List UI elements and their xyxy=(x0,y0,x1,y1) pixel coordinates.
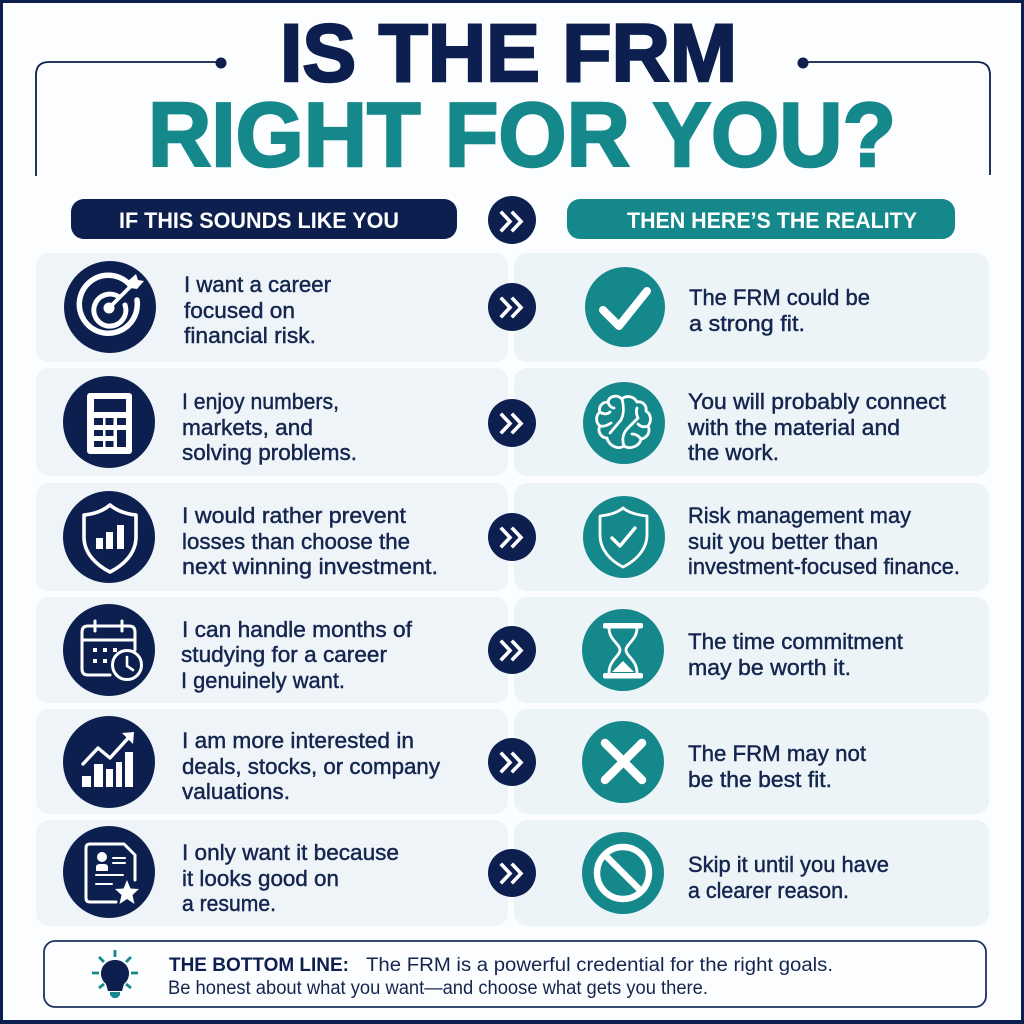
text: row 2 condition: solving problems. xyxy=(182,440,357,465)
text: bottom line message xyxy=(168,955,833,999)
text: bottom line message: Be honest about what you want—and choose what gets you there. xyxy=(168,978,708,999)
text: row 6 result: Skip it until you have xyxy=(688,852,889,877)
title: IS THE FRM xyxy=(280,8,737,99)
header: then here's the reality: THEN HERE’S THE REALITY xyxy=(627,208,917,233)
text: row 3 result: investment-focused finance. xyxy=(688,554,960,579)
text: row 6 condition xyxy=(182,840,399,916)
text: row 3 condition: I would rather prevent xyxy=(182,503,407,528)
text: row 5 result xyxy=(688,741,867,792)
text: bottom line message: The FRM is a powerful credential for the right goals. xyxy=(366,955,833,976)
text: row 4 result: The time commitment xyxy=(688,629,904,654)
panel: row 4 right xyxy=(514,597,989,703)
row 4 xyxy=(36,597,989,703)
text: row 1 result xyxy=(689,285,870,336)
panel: row 4 left xyxy=(36,597,508,703)
icon: rising chart xyxy=(63,716,155,808)
text: row 2 result: You will probably connect xyxy=(688,389,947,414)
text: row 3 result: Risk management may xyxy=(688,503,912,528)
title bracket right xyxy=(798,58,990,175)
text: row 2 condition: I enjoy numbers, xyxy=(182,389,339,414)
text: row 3 condition: losses than choose the xyxy=(182,529,410,554)
panel: row 1 right xyxy=(514,253,989,362)
title xyxy=(148,8,896,186)
text: row 2 result: with the material and xyxy=(687,415,900,440)
row 5 xyxy=(36,709,989,814)
arrow: row 3 xyxy=(488,513,536,561)
panel: row 2 right xyxy=(514,368,989,476)
text: bottom line message: THE BOTTOM LINE: xyxy=(169,955,349,976)
panel: row 5 left xyxy=(36,709,508,814)
icon: calendar with clock xyxy=(63,604,155,696)
text: row 1 condition: focused on xyxy=(184,298,295,323)
text: row 1 condition: financial risk. xyxy=(184,323,316,348)
icon: calculator xyxy=(63,376,155,468)
icon: shield with bars xyxy=(63,491,155,583)
row 3 xyxy=(36,483,989,591)
arrow: row 4 xyxy=(488,626,536,674)
text: row 2 condition xyxy=(182,389,357,465)
row 6 xyxy=(36,820,989,926)
icon: resume with star xyxy=(63,826,155,918)
row 2 xyxy=(36,368,989,476)
arrow: row 5 xyxy=(488,738,536,786)
callout: the bottom line xyxy=(44,941,986,1007)
text: row 2 result: the work. xyxy=(688,440,779,465)
text: row 1 condition: I want a career xyxy=(184,272,331,297)
text: row 5 condition: valuations. xyxy=(182,779,290,804)
text: row 5 result: The FRM may not xyxy=(688,741,867,766)
title bracket left xyxy=(36,58,226,176)
text: row 4 condition: I genuinely want. xyxy=(181,668,345,693)
panel: row 3 right xyxy=(514,483,989,591)
header: if this sounds like you xyxy=(71,199,457,239)
header arrow xyxy=(488,196,536,244)
panel: row 3 left xyxy=(36,483,508,591)
text: row 4 result xyxy=(688,629,904,680)
icon: cross xyxy=(582,721,664,803)
text: row 1 condition xyxy=(184,272,331,348)
panel: row 2 left xyxy=(36,368,508,476)
text: row 5 condition: I am more interested in xyxy=(182,728,414,753)
header: if this sounds like you: IF THIS SOUNDS LIKE YOU xyxy=(119,208,399,233)
text: row 5 result: be the best fit. xyxy=(688,767,832,792)
text: row 4 result: may be worth it. xyxy=(688,655,851,680)
text: row 4 condition xyxy=(181,617,413,693)
icon: shield with check xyxy=(583,496,665,578)
text: row 2 result xyxy=(687,389,947,465)
icon: hourglass xyxy=(582,609,664,691)
text: row 3 result xyxy=(688,503,960,579)
text: row 6 condition: it looks good on xyxy=(182,866,339,891)
icon: brain xyxy=(583,382,665,464)
panel: row 6 right xyxy=(514,820,989,926)
icon: light bulb xyxy=(92,950,138,998)
text: row 6 result: a clearer reason. xyxy=(688,878,849,903)
text: row 2 condition: markets, and xyxy=(182,415,313,440)
text: row 3 condition: next winning investment. xyxy=(182,554,438,579)
text: row 4 condition: I can handle months of xyxy=(182,617,413,642)
text: row 5 condition: deals, stocks, or company xyxy=(182,754,441,779)
text: row 1 result: The FRM could be xyxy=(689,285,870,310)
text: row 1 result: a strong fit. xyxy=(689,311,805,336)
panel: row 5 right xyxy=(514,709,989,814)
row 1 xyxy=(36,253,989,362)
title: RIGHT FOR YOU? xyxy=(148,85,896,186)
arrow: row 2 xyxy=(488,399,536,447)
text: row 3 result: suit you better than xyxy=(688,529,878,554)
panel: row 1 left xyxy=(36,253,508,362)
header: then here's the reality xyxy=(567,199,955,239)
text: row 5 condition xyxy=(182,728,441,804)
icon: target xyxy=(64,261,156,353)
text: row 6 result xyxy=(688,852,889,903)
arrow: row 6 xyxy=(488,849,536,897)
icon: check mark xyxy=(585,267,665,347)
text: row 3 condition xyxy=(182,503,438,579)
text: row 4 condition: studying for a career xyxy=(181,642,388,667)
icon: prohibited sign xyxy=(582,832,664,914)
panel: row 6 left xyxy=(36,820,508,926)
text: row 6 condition: I only want it because xyxy=(182,840,399,865)
arrow: row 1 xyxy=(488,283,536,331)
text: row 6 condition: a resume. xyxy=(182,891,276,916)
